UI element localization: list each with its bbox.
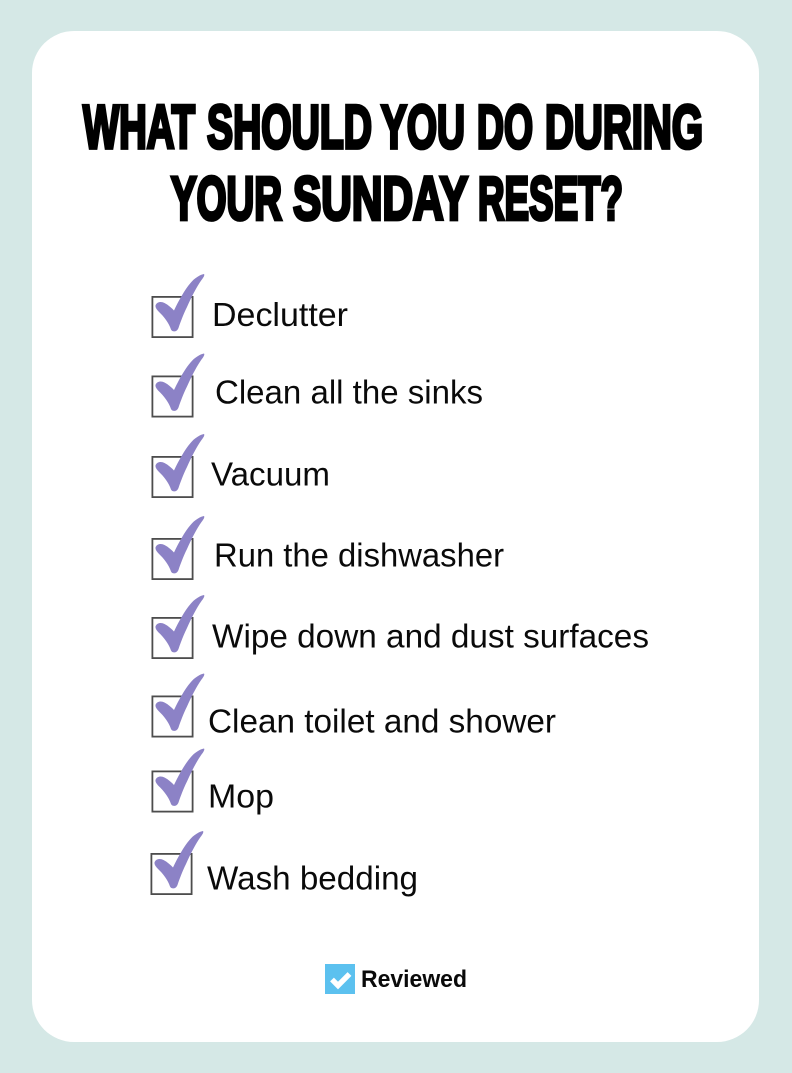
title <box>83 93 703 232</box>
item: Clean all the sinks: Clean all the sinks <box>215 374 483 410</box>
title: DURING <box>545 93 703 161</box>
logo wordmark: Reviewed <box>361 966 467 993</box>
item: Run the dishwasher: Run the dishwasher <box>214 536 504 574</box>
item: Clean toilet and shower: Clean toilet and shower <box>208 702 556 740</box>
title: WHAT <box>83 93 195 161</box>
item: Wipe down and dust surfaces: Wipe down and dust surfaces <box>212 618 649 654</box>
item: Vacuum: Vacuum <box>211 456 330 492</box>
icon: blue check square <box>325 964 355 994</box>
item: Mop <box>152 748 274 814</box>
item: Wipe down and dust surfaces <box>152 595 649 658</box>
title: YOU <box>381 93 465 161</box>
title: SUNDAY <box>293 164 468 232</box>
item: Mop: Mop <box>208 778 274 814</box>
item: Clean toilet and shower <box>152 674 556 740</box>
item: Declutter <box>152 274 348 337</box>
item: Run the dishwasher <box>152 516 504 579</box>
logo: Reviewed <box>325 964 467 994</box>
item: Clean all the sinks <box>152 354 483 417</box>
checklist <box>151 274 649 896</box>
item: Vacuum <box>152 434 330 497</box>
title: SHOULD <box>207 93 372 161</box>
item: Wash bedding: Wash bedding <box>207 860 418 896</box>
title: RESET? <box>478 164 623 232</box>
title: YOUR <box>171 164 282 232</box>
item: Wash bedding <box>151 831 418 896</box>
title: DO <box>477 93 533 161</box>
item: Declutter: Declutter <box>212 296 348 333</box>
